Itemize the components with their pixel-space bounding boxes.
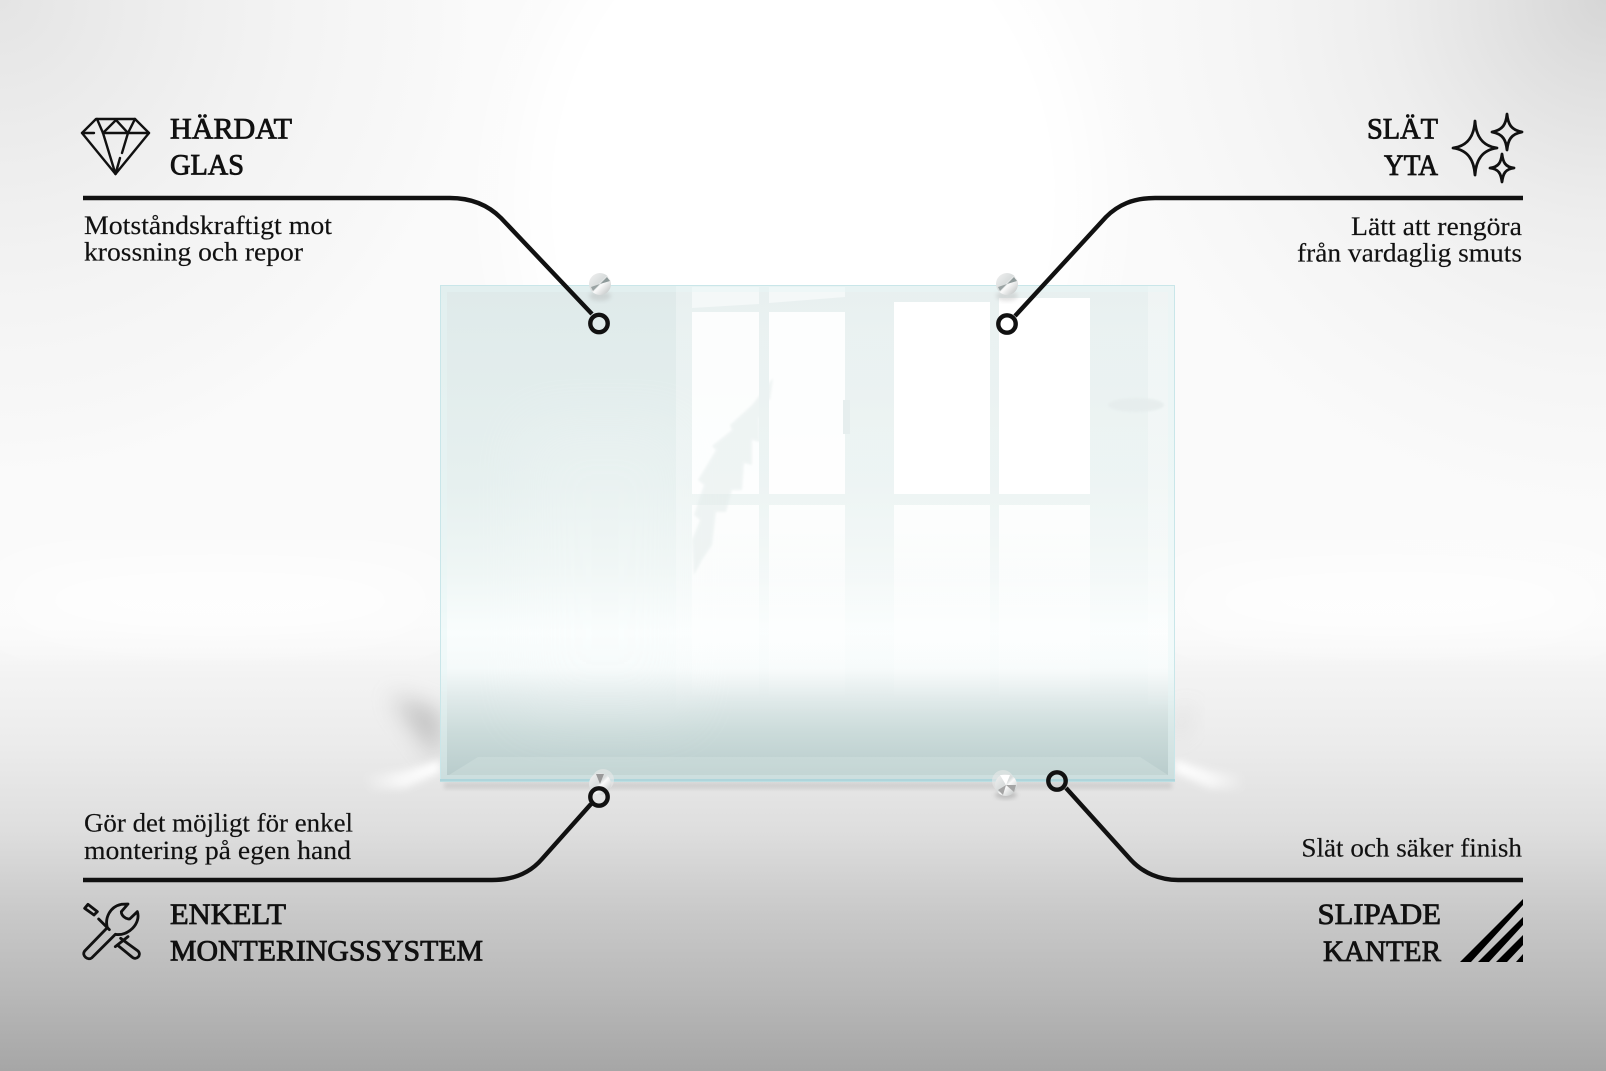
icon: sparkles [1453, 114, 1522, 182]
callout: enkelt monteringssystem [83, 788, 608, 968]
heading: MONTERINGSSYSTEM [170, 936, 483, 968]
heading: SLÄT [1367, 113, 1438, 145]
heading: KANTER [1323, 936, 1441, 968]
connector line [1066, 788, 1523, 880]
pin: bottom right [992, 770, 1017, 799]
pin: top left [589, 273, 611, 301]
glass panel [440, 285, 1175, 782]
description: från vardaglig smuts [1297, 239, 1522, 268]
callout: härdat glas [82, 113, 608, 332]
description: krossning och repor [84, 238, 303, 266]
description: Lätt att rengöra [1351, 212, 1522, 241]
marker ring [590, 315, 608, 332]
icon: polished edge stripes [1460, 899, 1523, 962]
heading: HÄRDAT [170, 113, 292, 145]
pin: top right [996, 273, 1018, 301]
heading: GLAS [170, 150, 244, 182]
marker ring [590, 788, 608, 806]
description: Gör det möjligt för enkel [84, 809, 353, 838]
marker ring [998, 315, 1016, 333]
description: montering på egen hand [84, 836, 351, 865]
heading: SLIPADE [1318, 899, 1441, 931]
callout: slipade kanter [1048, 772, 1523, 968]
callout: slät yta [998, 113, 1523, 333]
icon: tools [84, 904, 139, 959]
window reflection [676, 286, 1174, 601]
icon: diamond [82, 119, 149, 174]
connector line [1015, 198, 1523, 316]
connector line [83, 198, 592, 314]
description: Motståndskraftigt mot [84, 211, 333, 240]
connector line [83, 804, 591, 880]
description: Slät och säker finish [1301, 834, 1522, 863]
marker ring [1048, 772, 1066, 790]
mounting pins [589, 273, 1018, 799]
heading: ENKELT [170, 899, 286, 931]
heading: YTA [1384, 150, 1439, 182]
pin: bottom left [589, 769, 614, 795]
glass bevel edge [440, 285, 1175, 782]
